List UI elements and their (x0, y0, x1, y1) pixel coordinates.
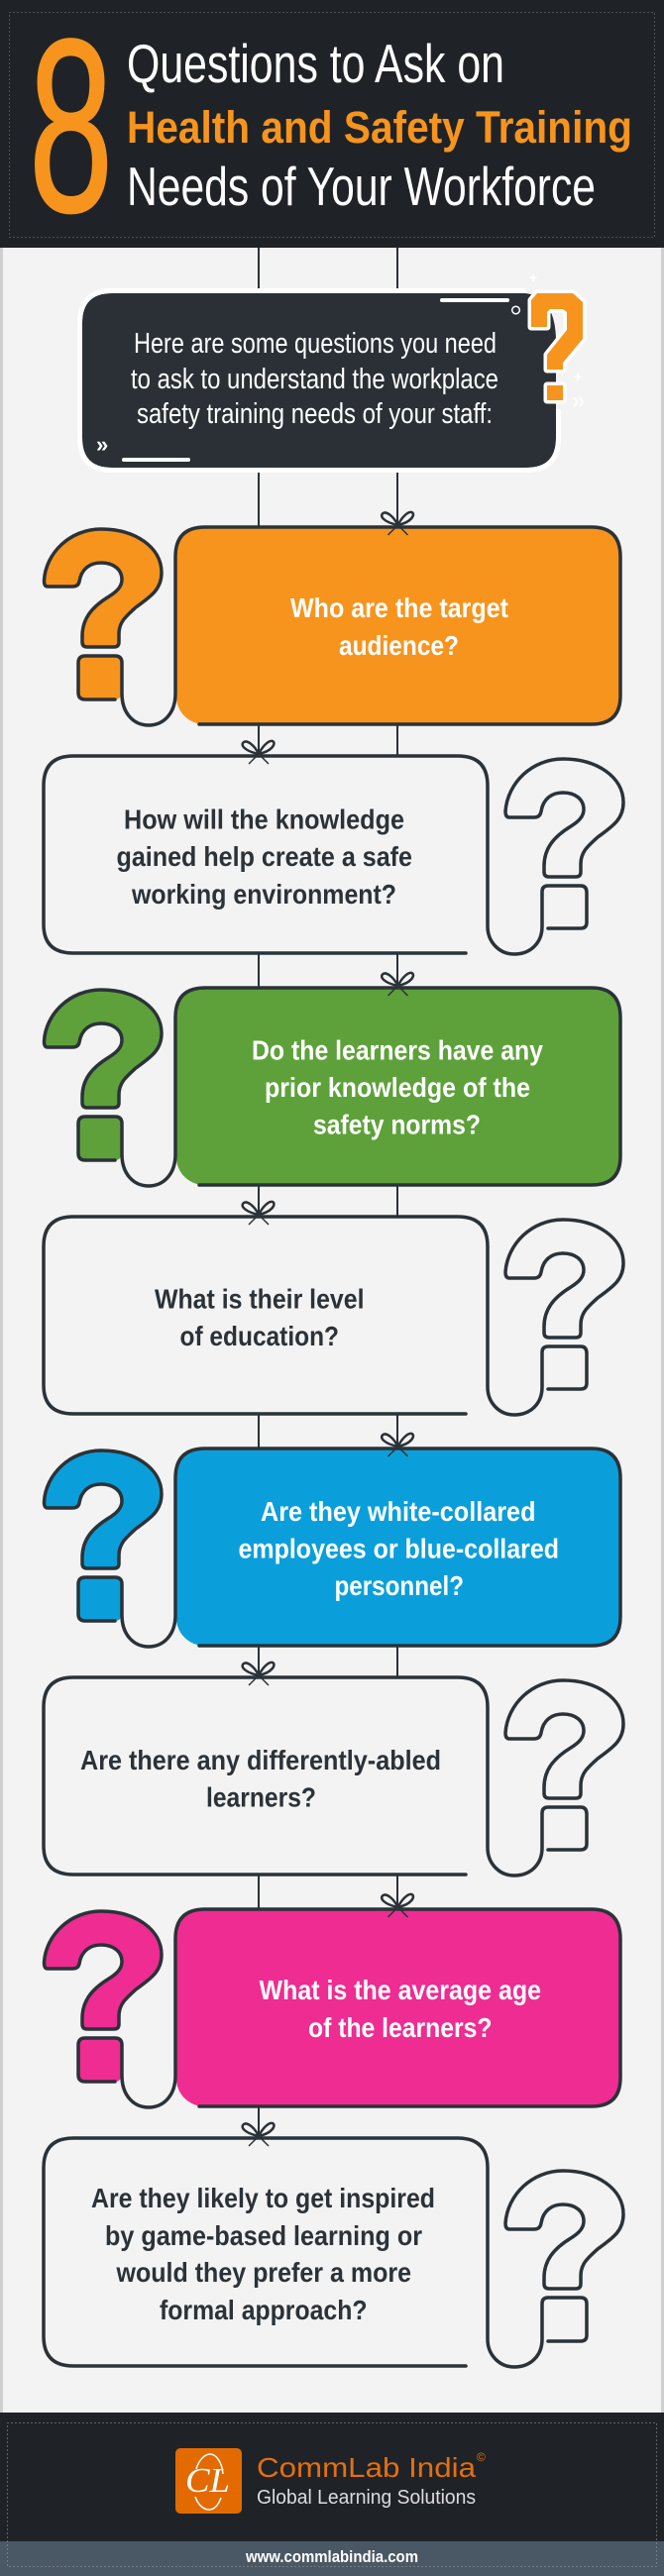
question 2 row: white (44, 741, 623, 954)
question 4 text (155, 1284, 365, 1351)
icon: orange question mark (531, 293, 583, 400)
question 2 text: How will the knowledge (124, 805, 404, 834)
intro text: Here are some questions you need (134, 328, 497, 360)
company name (257, 2450, 486, 2509)
question 3 row: green (44, 973, 620, 1186)
question 4 row: white (44, 1202, 623, 1415)
title: Questions to Ask on (127, 33, 504, 94)
question 7 row: pink (44, 1894, 620, 2107)
question 1 text (290, 592, 508, 661)
question 3 text (252, 1034, 543, 1139)
question 5 row: blue (44, 1434, 620, 1647)
logo mark (175, 2448, 242, 2514)
question 1 text: audience? (339, 630, 459, 661)
question 8 text: would they prefer a more (116, 2257, 411, 2288)
question 6 text: learners? (206, 1781, 316, 1813)
intro panel: + (574, 369, 582, 384)
question 6 row: white (44, 1663, 623, 1876)
intro panel: + (529, 269, 537, 285)
question 5 text: Are they white-collared (261, 1496, 535, 1527)
question 2 text: working environment? (131, 879, 396, 910)
intro panel: » (96, 432, 108, 457)
question 8 text: formal approach? (160, 2295, 367, 2325)
intro text: to ask to understand the workplace (131, 364, 498, 395)
intro panel: » (572, 387, 585, 414)
question 7 text: What is the average age (260, 1975, 541, 2005)
question 8 row: white (44, 2123, 623, 2367)
intro text: safety training needs of your staff: (137, 398, 493, 430)
question 8 text: Are they likely to get inspired (91, 2183, 435, 2213)
question 8 text (91, 2183, 435, 2325)
connector strings (259, 248, 397, 2138)
company name: Global Learning Solutions (257, 2487, 476, 2509)
question 4 text: of education? (180, 1321, 339, 1351)
question 6 text (80, 1745, 441, 1813)
question 5 text: employees or blue-collared (238, 1534, 559, 1563)
title (127, 33, 632, 217)
intro panel (79, 269, 585, 470)
website url: www.commlabindia.com (245, 2548, 418, 2566)
question 8 text: by game-based learning or (105, 2220, 422, 2251)
question 5 text: personnel? (335, 1570, 464, 1601)
question 3 text: prior knowledge of the (265, 1072, 530, 1103)
question 6 text: Are there any differently-abled (80, 1745, 441, 1775)
question 3 text: safety norms? (313, 1110, 481, 1139)
question 7 text: of the learners? (308, 2012, 492, 2043)
question 2 text: gained help create a safe (117, 841, 412, 872)
question 4 text: What is their level (155, 1284, 365, 1314)
company name: CommLab India (257, 2452, 476, 2483)
question 1 text: Who are the target (290, 592, 508, 623)
intro text (131, 328, 498, 430)
company name: © (477, 2450, 486, 2464)
question 3 text: Do the learners have any (252, 1034, 543, 1066)
header banner (0, 0, 664, 264)
question 2 text (117, 805, 412, 910)
question 1 row: orange (44, 512, 620, 725)
logo mark: CL (185, 2461, 230, 2500)
question 7 text (260, 1975, 541, 2043)
footer (0, 2413, 664, 2576)
question 5 text (238, 1496, 559, 1601)
